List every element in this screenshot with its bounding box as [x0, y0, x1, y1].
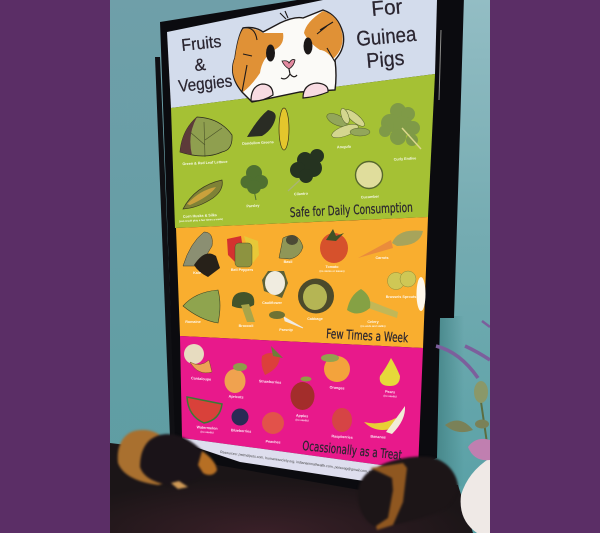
ingredient labels: pink: Cantaloupe: [191, 376, 211, 382]
flower vase: [461, 439, 490, 533]
ingredient labels: green: Arugula: [337, 145, 352, 149]
wall top strip: [160, 0, 330, 24]
icon: celery: [347, 289, 398, 318]
panel: poster header: [167, 0, 437, 108]
ingredient labels: pink: Apples: [296, 414, 308, 418]
leaves: [445, 420, 489, 432]
ear and fur lines: [242, 11, 335, 92]
section title: Ocassionally as a Treat: Ocassionally as a Treat: [302, 439, 403, 464]
heading: Fruits & Veggies: Veggies: [177, 71, 233, 96]
panel: safe for daily consumption: [171, 74, 435, 228]
heading: For Guinea Pigs: Guinea: [355, 23, 417, 51]
icon: cabbage: [298, 278, 334, 314]
icon: curly endive: [379, 103, 421, 149]
ingredient labels: pink: (no seeds): [295, 418, 309, 422]
icon: blueberry: [232, 408, 248, 426]
icon: carrot: [358, 230, 423, 258]
icon: strawberry: [261, 346, 283, 375]
ingredient labels: pink: (no seeds): [200, 430, 214, 434]
icon: parsley: [240, 165, 268, 200]
icon: banana: [364, 406, 405, 434]
ingredient labels: green: Corn Husks & Silks: [183, 213, 217, 219]
ingredient labels: orange: Basil: [284, 260, 292, 264]
ingredient labels: pink: Apricots: [228, 394, 244, 400]
icon: orange: [321, 354, 350, 382]
footer credits: Resources: petmd/pets.com, humanesociety.org, indiananimalhealth.com, petswag@gmail.com, pdsa.org.uk: [220, 450, 387, 476]
ingredient labels: pink: Peaches: [265, 439, 281, 445]
ingredient labels: pink: Pears: [385, 390, 395, 394]
orange fur patch right: [304, 11, 343, 59]
ingredient labels: green: Dandelion Greens: [242, 140, 274, 146]
icon: cauliflower: [262, 271, 288, 298]
icon: pear: [380, 358, 400, 386]
teal wall left: [110, 0, 190, 533]
icon: cilantro: [288, 149, 324, 191]
icon: bell peppers: [227, 236, 259, 267]
ingredient labels: orange: Carrots: [375, 256, 389, 260]
heading: Fruits & Veggies: Fruits: [180, 32, 222, 55]
icon: apple: [290, 376, 314, 410]
icon: raspberry: [332, 408, 352, 432]
ingredient labels: orange: Cabbage: [307, 317, 323, 321]
panel: occasionally as a treat: [180, 336, 423, 470]
ingredient labels: pink: Oranges: [329, 385, 345, 391]
icon: cantaloupe: [184, 344, 212, 373]
icon: broccoli: [232, 292, 255, 322]
icon: peach: [262, 412, 284, 434]
icon: parsnip: [269, 311, 303, 328]
ingredient labels: orange: Parsnip: [279, 328, 294, 332]
wall shadow behind frame: [436, 316, 464, 486]
ingredient labels: green: Cucumber: [361, 194, 380, 199]
guinea pig illustration: [233, 10, 344, 102]
heading: For Guinea Pigs: [355, 0, 417, 73]
section title: Safe for Daily Consumption: Safe for Daily Consumption: [290, 201, 413, 221]
ingredient labels: orange: Broccoli: [239, 324, 253, 328]
teal wall right: [400, 0, 490, 533]
ingredient labels: orange: Brussels Sprouts: [386, 295, 416, 299]
icon: lettuce: [180, 117, 232, 157]
ingredient labels: orange: (no stems or leaves): [319, 269, 345, 273]
ingredient labels: pink: Blueberries: [231, 428, 251, 434]
ingredient labels: pink: Strawberries: [259, 379, 281, 385]
ingredient labels: green: Green & Red Leaf Lettuce: [182, 160, 228, 166]
heading: Fruits & Veggies: &: [193, 55, 207, 75]
ingredient labels: orange: Celery: [367, 320, 380, 324]
icon: brussels sprouts: [388, 271, 416, 290]
poster footer strip: [182, 438, 418, 488]
icon: corn: [183, 180, 222, 209]
stem and bud: [474, 381, 488, 450]
ingredient labels: pink: Watermelon: [196, 425, 218, 431]
poster frame: [155, 0, 464, 490]
ingredient labels: pink: Bananas: [370, 434, 386, 440]
icon: watermelon: [187, 397, 222, 423]
left guinea pig: [118, 430, 217, 489]
ingredient labels: green: [179, 140, 416, 223]
ingredient labels: green: Parsley: [246, 204, 261, 208]
icon: arugula: [325, 107, 370, 140]
section title: Few Times a Week: Few Times a Week: [326, 327, 409, 346]
icon: cucumber slice: [356, 162, 382, 188]
ingredient labels: orange: Bell Peppers: [231, 268, 253, 272]
ingredient labels: pink: Raspberries: [331, 434, 353, 440]
ingredient labels: orange: [185, 256, 416, 332]
icon: apricot: [224, 363, 247, 393]
icon: romaine: [183, 290, 220, 323]
flowers: [436, 321, 490, 450]
paws: [251, 83, 328, 101]
ingredient labels: green: Curly Endive: [394, 156, 416, 162]
ingredient labels: pink: [191, 376, 397, 445]
icon: basil: [279, 235, 303, 259]
ingredient labels: orange: (no ends and stalks): [360, 324, 386, 328]
ingredient labels: orange: Tomato: [325, 265, 339, 269]
ingredient labels: orange: Romaine: [185, 320, 201, 324]
ingredient labels: green: (can result play a few times a week): [179, 217, 223, 223]
icon: kale: [183, 232, 220, 277]
orange fur patch left: [233, 28, 283, 92]
glare: [416, 277, 426, 311]
ingredient labels: green: Cilantro: [294, 192, 309, 196]
nose and mouth: [281, 59, 297, 79]
ingredient labels: orange: Kale: [193, 271, 201, 275]
ingredient labels: pink: (no seeds): [383, 394, 397, 398]
pink blossom: [468, 439, 490, 460]
heading: For Guinea Pigs: Pigs: [365, 47, 405, 73]
icon: tomato: [320, 229, 348, 263]
right guinea pig: [358, 457, 458, 530]
icon: dandelion greens: [247, 108, 289, 150]
dark table top: [110, 443, 473, 533]
lavender sprigs: [436, 321, 490, 378]
ingredient labels: orange: Cauliflower: [262, 301, 283, 305]
eyes: [266, 38, 312, 62]
heading: Fruits & Veggies: [177, 32, 233, 96]
panel: few times a week: [176, 217, 428, 348]
